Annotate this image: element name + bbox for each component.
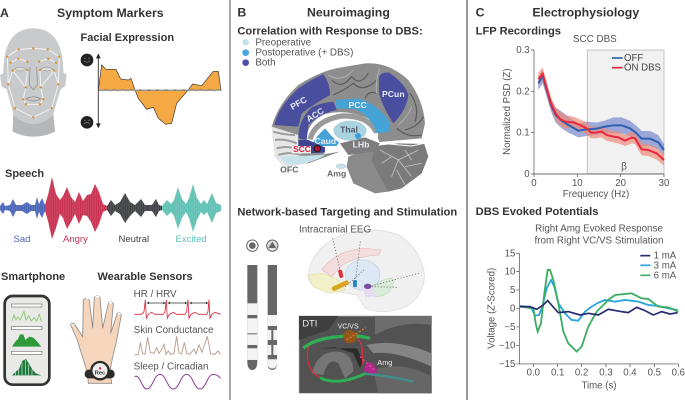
- region: PCC: PCC: [349, 100, 368, 110]
- region: Thal: Thal: [340, 124, 358, 134]
- chart: evoked potentials: 0: [510, 303, 515, 314]
- brainstem: [347, 145, 388, 193]
- heading: LFP recordings: LFP Recordings: [476, 25, 561, 37]
- legend: brain regions: Postoperative (+ DBS): [255, 48, 353, 59]
- chart: evoked potentials: Time (s): [581, 381, 617, 392]
- DTI image: DTI: [302, 319, 317, 329]
- electrode: ring contacts: [247, 265, 257, 370]
- DTI image: Amg: [377, 358, 392, 367]
- label: angry: Angry: [63, 234, 88, 245]
- region: Thal: [333, 121, 367, 141]
- chart: LFP power spectrum: 10: [572, 178, 583, 189]
- legend: off / on DBS: OFF: [624, 53, 643, 64]
- legend: off / on DBS: ON DBS: [624, 63, 661, 74]
- panel letter B: B: [237, 6, 246, 20]
- region: PFC: [274, 74, 330, 127]
- chart: evoked potentials: Voltage (Z-Scored): [486, 268, 497, 349]
- chart: LFP power spectrum: 0.2: [516, 86, 530, 97]
- brain sagittal view: [272, 63, 428, 193]
- waveform: excited: [162, 184, 221, 232]
- region: Caud: [313, 128, 339, 146]
- waveform: angry: [45, 177, 107, 239]
- region: PFC: PFC: [288, 94, 309, 112]
- panel letter C: C: [476, 6, 485, 20]
- region: OFC: [280, 155, 326, 174]
- label: sad: Sad: [14, 234, 30, 245]
- region: ACC: [298, 102, 337, 140]
- legend: brain regions: Both: [255, 58, 276, 69]
- region: LHb: LHb: [353, 140, 369, 150]
- sensor traces: [134, 289, 221, 389]
- chart: evoked potentials: 10: [505, 267, 515, 278]
- trace: sleep circadian: [135, 374, 221, 389]
- chart: evoked potentials: 15: [505, 248, 515, 259]
- chart: LFP power spectrum: Frequency (Hz): [563, 189, 629, 200]
- heading: speech: Speech: [5, 168, 44, 180]
- inner white cavity: [307, 112, 380, 154]
- chart: LFP power spectrum: β: [621, 161, 627, 172]
- chart: evoked potentials: −15: [499, 359, 515, 370]
- region: OFC: OFC: [280, 164, 299, 174]
- region: PCC: [335, 98, 390, 133]
- region: Amg: Amg: [327, 169, 346, 179]
- DTI image: VC/VS: [338, 323, 359, 330]
- glass brain with implanted electrodes: [308, 230, 425, 312]
- legend: stimulation current: [640, 251, 677, 281]
- heading: correlation with response: Correlation with Response to DBS:: [237, 26, 423, 38]
- chart: evoked potentials: 0.3: [599, 368, 613, 379]
- waveform: neutral: [107, 193, 162, 223]
- heading: smartphone: Smartphone: [1, 271, 65, 283]
- icon: sad face: [81, 116, 93, 129]
- icon: hand with wrist device: Rec: [95, 370, 105, 376]
- icon: hand with wrist device: [71, 296, 121, 383]
- chart: evoked potentials: −5: [504, 322, 515, 333]
- chart: evoked potentials: 5: [510, 285, 515, 296]
- chart: LFP power spectrum: SCC DBS: [573, 34, 617, 45]
- region: PCun: [379, 72, 408, 123]
- legend: brain regions: [242, 37, 353, 69]
- chart: LFP power spectrum: 0.1: [516, 128, 530, 139]
- chart: LFP power spectrum: 30: [659, 178, 669, 189]
- heading: symptom markers: Symptom Markers: [57, 6, 164, 20]
- chart: LFP power spectrum: 20: [615, 178, 626, 189]
- icon: face with landmarks: [0, 28, 67, 137]
- legend: stimulation current: 1 mA: [654, 251, 677, 262]
- chart: LFP power spectrum: Normalized PSD (Z): [502, 68, 513, 155]
- heading: DBS evoked potentials: DBS Evoked Potentials: [476, 206, 598, 218]
- beta band shading: [587, 50, 664, 174]
- icon: happy face: [81, 54, 93, 66]
- trace: skin conductance: [135, 336, 221, 355]
- trace: heart rate: [134, 300, 221, 318]
- chart: LFP power spectrum: 0.3: [516, 45, 530, 56]
- panel B: neuroimaging: [237, 6, 457, 393]
- legend: off / on DBS: [612, 53, 661, 74]
- heading: network-based targeting: Network-based Targeting and Stimulation: [237, 206, 457, 218]
- region: SCC: [292, 140, 325, 154]
- chart: evoked potentials: 0.4: [623, 368, 637, 379]
- chart: evoked potentials: 0.0: [527, 368, 540, 379]
- legend: brain regions: Preoperative: [255, 37, 312, 48]
- chart: evoked potentials: [486, 224, 685, 392]
- cerebellum: [372, 143, 428, 192]
- icon: electrode cross-sections: [247, 240, 278, 251]
- electrode: segmented contacts: [268, 265, 277, 370]
- label: intracranial EEG: Intracranial EEG: [299, 225, 371, 236]
- heading: wearable sensors: Wearable Sensors: [98, 271, 193, 283]
- region: SCC: SCC: [293, 144, 311, 154]
- chart: evoked potentials: 0.1: [551, 368, 564, 379]
- chart: LFP power spectrum: 0: [524, 169, 530, 180]
- chart: speech waveform: [0, 177, 221, 239]
- chart: evoked potentials: 0.5: [648, 368, 661, 379]
- label: excited: Excited: [176, 234, 207, 245]
- heading: electrophysiology: Electrophysiology: [532, 6, 639, 20]
- panel letter A: A: [0, 6, 9, 20]
- region: PCun: PCun: [382, 89, 405, 99]
- legend: stimulation current: 3 mA: [654, 260, 677, 271]
- chart: facial expression valence: [81, 53, 222, 129]
- label: skin conductance: Skin Conductance: [134, 325, 214, 336]
- chart: LFP power spectrum: [502, 34, 669, 200]
- DTI image: [299, 316, 432, 393]
- chart: evoked potentials: 0.6: [672, 368, 685, 379]
- label: neutral: Neutral: [118, 234, 149, 245]
- legend: stimulation current: 6 mA: [654, 270, 677, 281]
- label: sleep / circadian: Sleep / Circadian: [134, 362, 208, 373]
- region: Caud: Caud: [315, 136, 336, 146]
- region: ACC: ACC: [304, 105, 326, 124]
- panel C: electrophysiology: [476, 6, 685, 392]
- panel A: symptom markers: [0, 6, 222, 389]
- chart: evoked potentials: from Right VC/VS Stimulation: [535, 235, 663, 246]
- label: HR / HRV: HR / HRV: [134, 289, 177, 300]
- region: Amg: [327, 164, 346, 179]
- heading: facial expression: Facial Expression: [80, 32, 174, 44]
- waveform: sad: [0, 197, 45, 219]
- chart: evoked potentials: −10: [499, 340, 515, 351]
- icon: smartphone: [5, 296, 49, 385]
- chart: evoked potentials: Right Amg Evoked Response: [535, 224, 663, 235]
- heading: neuroimaging: Neuroimaging: [307, 6, 390, 20]
- chart: evoked potentials: 0.2: [575, 368, 588, 379]
- region: LHb: [353, 133, 369, 150]
- chart: LFP power spectrum: 0: [531, 178, 537, 189]
